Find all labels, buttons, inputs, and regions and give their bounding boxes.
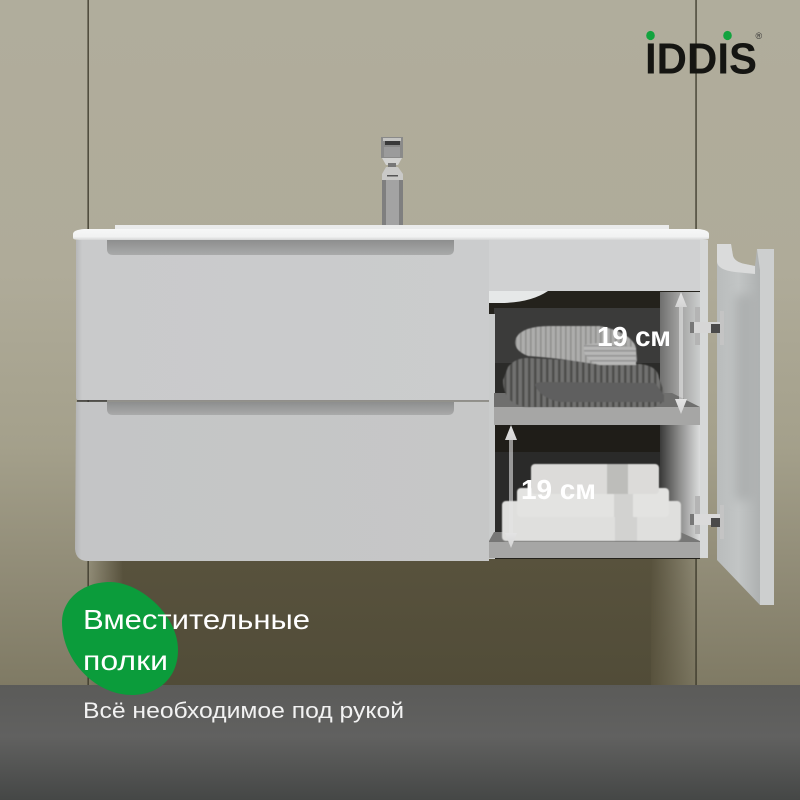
dimension label lower: 19 см <box>521 474 596 505</box>
green blob <box>62 582 178 695</box>
upper drawer <box>76 240 489 400</box>
basin top <box>73 225 709 240</box>
vanity cabinet <box>73 225 774 605</box>
floor <box>0 685 800 800</box>
upper shelf <box>494 393 700 425</box>
subheading: Всё необходимое под рукой <box>83 698 404 723</box>
heading: полки <box>83 645 168 676</box>
upper panel of open section <box>489 240 707 292</box>
hinge top <box>690 307 724 345</box>
lower shelf <box>489 532 700 558</box>
faucet <box>381 137 403 227</box>
logo: IDDIS: IDDIS <box>645 34 757 84</box>
open door <box>717 244 774 605</box>
towels upper shelf <box>503 326 664 407</box>
dimension label upper: 19 см <box>597 321 671 352</box>
heading <box>83 604 310 676</box>
towels lower shelf <box>502 464 681 541</box>
open compartment <box>489 291 700 559</box>
heading: Вместительные <box>83 604 310 635</box>
cabinet side <box>700 240 708 558</box>
logo: IDDIS: ® <box>756 31 762 41</box>
lower drawer <box>75 400 489 561</box>
dimension arrow upper <box>675 292 687 414</box>
dimension arrow lower <box>505 425 517 548</box>
hinge bottom <box>690 496 724 539</box>
